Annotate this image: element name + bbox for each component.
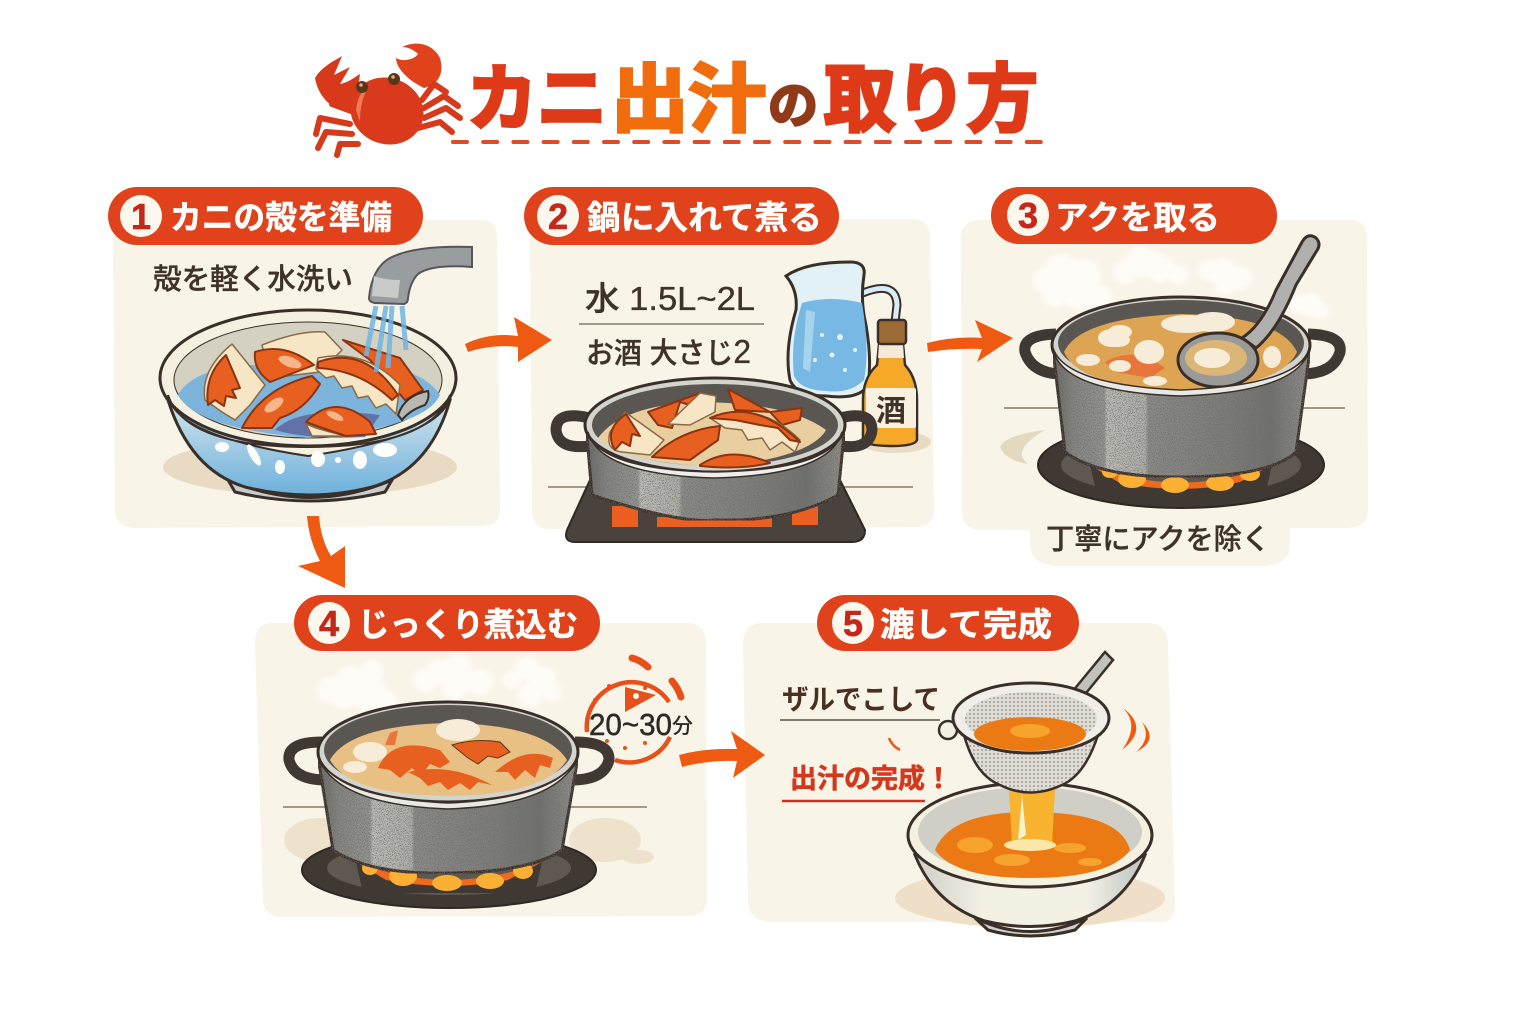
badge: step 4 <box>294 595 600 651</box>
icon: round burner <box>302 832 596 908</box>
smear patches <box>284 818 654 864</box>
badge: step 3 <box>991 187 1277 244</box>
badge: step 1: カニの殻を準備 <box>170 199 392 236</box>
panel: step 2 <box>530 219 934 542</box>
icon: sake bottle: 酒 <box>876 395 906 428</box>
icon: soup bowl <box>908 783 1152 936</box>
text: sake amount: お酒 大さじ2 <box>586 333 751 370</box>
text: strain note: ザルでこして <box>782 684 940 715</box>
text: water amount: 水 1.5L~2L <box>585 280 755 317</box>
icon: timer <box>587 658 693 762</box>
title: の <box>768 78 818 134</box>
panel background 1 <box>113 220 500 528</box>
panel background 3 <box>961 220 1368 566</box>
badge: step 4: じっくり煮込む <box>358 606 578 643</box>
icon: burner plate <box>566 480 865 542</box>
badge: step 3: 3 <box>1018 195 1038 236</box>
table line <box>283 806 647 808</box>
table line <box>548 486 913 488</box>
icon: pot with foam <box>1025 236 1340 477</box>
badge: step 5: 漉して完成 <box>880 606 1052 643</box>
smear <box>1000 430 1045 464</box>
title: 出汁 <box>611 58 766 141</box>
arrow: step 4 to 5 <box>679 731 765 778</box>
icon: water jug <box>786 262 897 397</box>
panel: step 1 <box>113 220 500 528</box>
icon: round burner <box>1038 422 1324 508</box>
text: finished: 出汁の完成！ <box>790 764 952 794</box>
badge: step 5: 5 <box>843 603 863 644</box>
table line <box>1004 407 1345 409</box>
title <box>467 58 1038 141</box>
icon: faucet <box>366 247 472 372</box>
shells <box>204 332 429 436</box>
icon: broth stream <box>1004 790 1056 851</box>
title: カニ <box>467 60 607 140</box>
icon: timer: 分 <box>672 715 693 738</box>
arrow: step 2 to 3 <box>927 320 1013 362</box>
panel background 5 <box>743 623 1175 922</box>
icon: pot with shells <box>289 702 609 873</box>
badge: step 1: 1 <box>131 196 151 237</box>
badge: step 2: 2 <box>548 196 568 237</box>
panel: step 4 <box>255 623 707 917</box>
bowl shadow <box>895 868 1165 928</box>
panel background 2 <box>530 219 934 529</box>
title: 取り方 <box>824 58 1038 141</box>
steam clouds <box>1032 246 1329 319</box>
panel: step 5 <box>743 623 1175 936</box>
panel background 4 <box>255 623 707 917</box>
steam clouds <box>317 654 561 714</box>
badge: step 2: 鍋に入れて煮る <box>587 199 822 236</box>
title: crab illustration <box>315 44 460 155</box>
title dashed underline <box>453 140 1051 144</box>
badge: step 3: アクを取る <box>1055 199 1220 236</box>
icon: sake bottle <box>859 320 931 453</box>
bowl with shells <box>160 310 456 501</box>
arrow: step 1 down to 4 <box>298 516 345 588</box>
icon: pot with shells <box>556 378 872 520</box>
icon: timer: 20~30 <box>589 707 672 742</box>
badge: step 1 <box>108 187 423 245</box>
panel: step 3 <box>961 220 1368 566</box>
icon: strainer <box>939 652 1113 792</box>
motion arcs <box>1122 708 1150 752</box>
badge: step 4: 4 <box>319 603 339 644</box>
bowl shadow <box>163 438 457 496</box>
text: step 1 note: 殻を軽く水洗い <box>153 263 353 296</box>
text: step 3 note: 丁寧にアクを除く <box>1046 523 1270 556</box>
badge: step 2 <box>524 187 839 245</box>
arrow: step 1 to 2 <box>465 317 552 362</box>
badge: step 5 <box>817 595 1079 651</box>
